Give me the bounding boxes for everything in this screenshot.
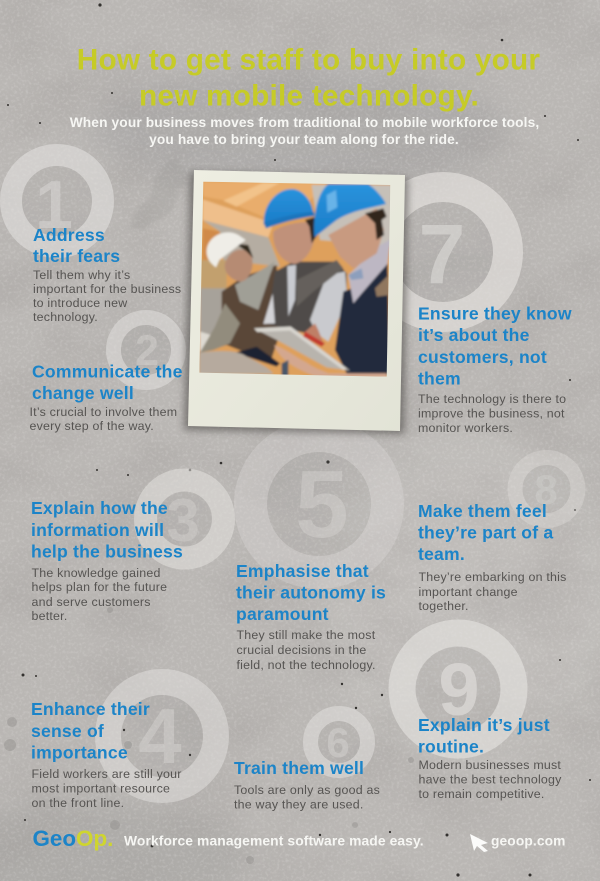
heading block 9: Explain it's just routine: have the best technology (418, 772, 562, 786)
heading block 8: Make them feel: Make them feel (418, 501, 547, 521)
subtitle (70, 115, 539, 147)
heading block 5: Emphasise autonomy: paramount (236, 604, 329, 624)
heading block 3: Explain how the information: and serve customers (32, 595, 151, 609)
heading block 3: Explain how the information (31, 498, 183, 623)
heading block 4: Enhance importance: Field workers are still your (32, 767, 182, 781)
number badge 6 (310, 714, 368, 770)
heading block 7: Ensure they know: The technology is there to (418, 392, 566, 406)
number badge 4: 4 (138, 692, 182, 780)
number badge 9: 9 (438, 648, 480, 731)
heading block 4: Enhance importance (31, 699, 182, 810)
heading block 1: Address their fears (33, 225, 181, 324)
heading block 8: Make them feel: together. (418, 599, 469, 613)
number badge 8 (515, 458, 578, 520)
footer tagline: Workforce management software made easy. (124, 832, 424, 848)
number badge 2 (114, 318, 178, 382)
heading block 1: Address their fears: important for the business (33, 282, 181, 296)
heading block 1: Address their fears: Tell them why it’s (33, 268, 130, 282)
heading block 9: Explain it's just routine: Modern businesses must (418, 758, 561, 772)
heading block 6: Train them well: Tools are only as good as (234, 783, 380, 797)
heading block 1: Address their fears: technology. (33, 310, 98, 324)
heading block 5: Emphasise autonomy: Emphasise that (236, 561, 369, 581)
heading block 9: Explain it's just routine: Explain it’s just (418, 715, 550, 735)
middle worker (267, 262, 347, 337)
heading block 6: Train them well: the way they are used. (234, 798, 364, 812)
footer logo: GeoOp: GeoOp. (32, 826, 113, 851)
heading block 8: Make them feel: they’re part of a (418, 522, 553, 542)
heading block 9: Explain it's just routine: routine. (418, 736, 484, 756)
number badge 7 (378, 187, 508, 317)
heading block 2: Communicate the change well (30, 362, 183, 433)
number badge 5: 5 (295, 451, 349, 558)
polaroid photo frame (184, 170, 408, 434)
left worker (220, 264, 280, 359)
heading block 4: Enhance importance: sense of (31, 721, 104, 741)
heading block 4: Enhance importance: Enhance their (31, 699, 150, 719)
tablet and hands (254, 327, 350, 371)
number badge 1 (11, 155, 103, 247)
photo: three workers with hard hats and tablet (197, 180, 397, 380)
heading block 3: Explain how the information: helps plan for the future (32, 580, 167, 594)
title: new mobile technology. (139, 80, 479, 112)
blueprint (199, 351, 273, 374)
number badge 6: 6 (326, 719, 350, 766)
heading block 5: Emphasise autonomy (236, 561, 386, 672)
heading block 2: Communicate the change well: It’s crucial to involve them (30, 405, 177, 419)
heading block 7: Ensure they know: customers, not (418, 347, 547, 367)
heading block 6: Train them well (234, 758, 380, 812)
subtitle: you have to bring your team along for the ride. (149, 132, 459, 147)
heading block 3: Explain how the information: Explain how the (31, 498, 168, 518)
heading block 1: Address their fears: their fears (33, 246, 120, 266)
heading block 4: Enhance importance: on the front line. (32, 796, 124, 810)
icon: cursor arrow (470, 834, 488, 852)
heading block 6: Train them well: Train them well (234, 758, 364, 778)
number badge 5 (250, 436, 388, 572)
heading block 7: Ensure they know: Ensure they know (418, 304, 572, 324)
heading block 2: Communicate the change well: Communicate the (32, 362, 183, 382)
heading block 9: Explain it's just routine: to remain competitive. (418, 787, 545, 801)
heading block 7: Ensure they know: monitor workers. (418, 421, 513, 435)
number badge 4 (108, 682, 216, 790)
heading block 7: Ensure they know (418, 304, 572, 435)
right worker (335, 255, 390, 375)
heading block 7: Ensure they know: it’s about the (418, 325, 530, 345)
heading block 7: Ensure they know: improve the business, not (418, 406, 565, 420)
heading block 1: Address their fears: Address (33, 225, 105, 245)
heading block 4: Enhance importance: most important resource (32, 782, 170, 796)
heading block 5: Emphasise autonomy: crucial decisions in the (236, 643, 366, 657)
heading block 9: Explain it's just routine (418, 715, 562, 801)
number badge 9 (402, 633, 514, 745)
heading block 3: Explain how the information: information will (31, 520, 164, 540)
heading block 4: Enhance importance: importance (31, 742, 128, 762)
heading block 8: Make them feel: They’re embarking on this (418, 570, 567, 584)
footer website: geoop.com (491, 834, 566, 848)
heading block 2: Communicate the change well: every step of the way. (30, 419, 154, 433)
heading block 1: Address their fears: to introduce new (33, 296, 127, 310)
heading block 8: Make them feel (418, 501, 567, 613)
heading block 7: Ensure they know: them (418, 368, 461, 388)
heading block 5: Emphasise autonomy: They still make the most (236, 628, 376, 642)
heading block 8: Make them feel: team. (418, 544, 465, 564)
title (77, 44, 540, 112)
number badge 1: 1 (35, 167, 73, 243)
number badge 3 (146, 480, 224, 558)
number badge 3: 3 (166, 487, 200, 554)
number badge 7: 7 (419, 207, 465, 301)
heading block 3: Explain how the information: better. (32, 609, 67, 623)
number badge 2: 2 (135, 327, 159, 375)
heading block 2: Communicate the change well: change well (32, 383, 134, 403)
heading block 3: Explain how the information: help the business (31, 542, 183, 562)
heading block 5: Emphasise autonomy: their autonomy is (236, 582, 386, 602)
subtitle: When your business moves from traditional to mobile workforce tools, (70, 115, 539, 130)
title: How to get staff to buy into your (77, 44, 540, 76)
heading block 5: Emphasise autonomy: field, not the technology. (236, 658, 376, 672)
heading block 3: Explain how the information: The knowledge gained (32, 566, 161, 580)
heading block 8: Make them feel: important change (418, 585, 518, 599)
number badge 8: 8 (534, 466, 558, 513)
